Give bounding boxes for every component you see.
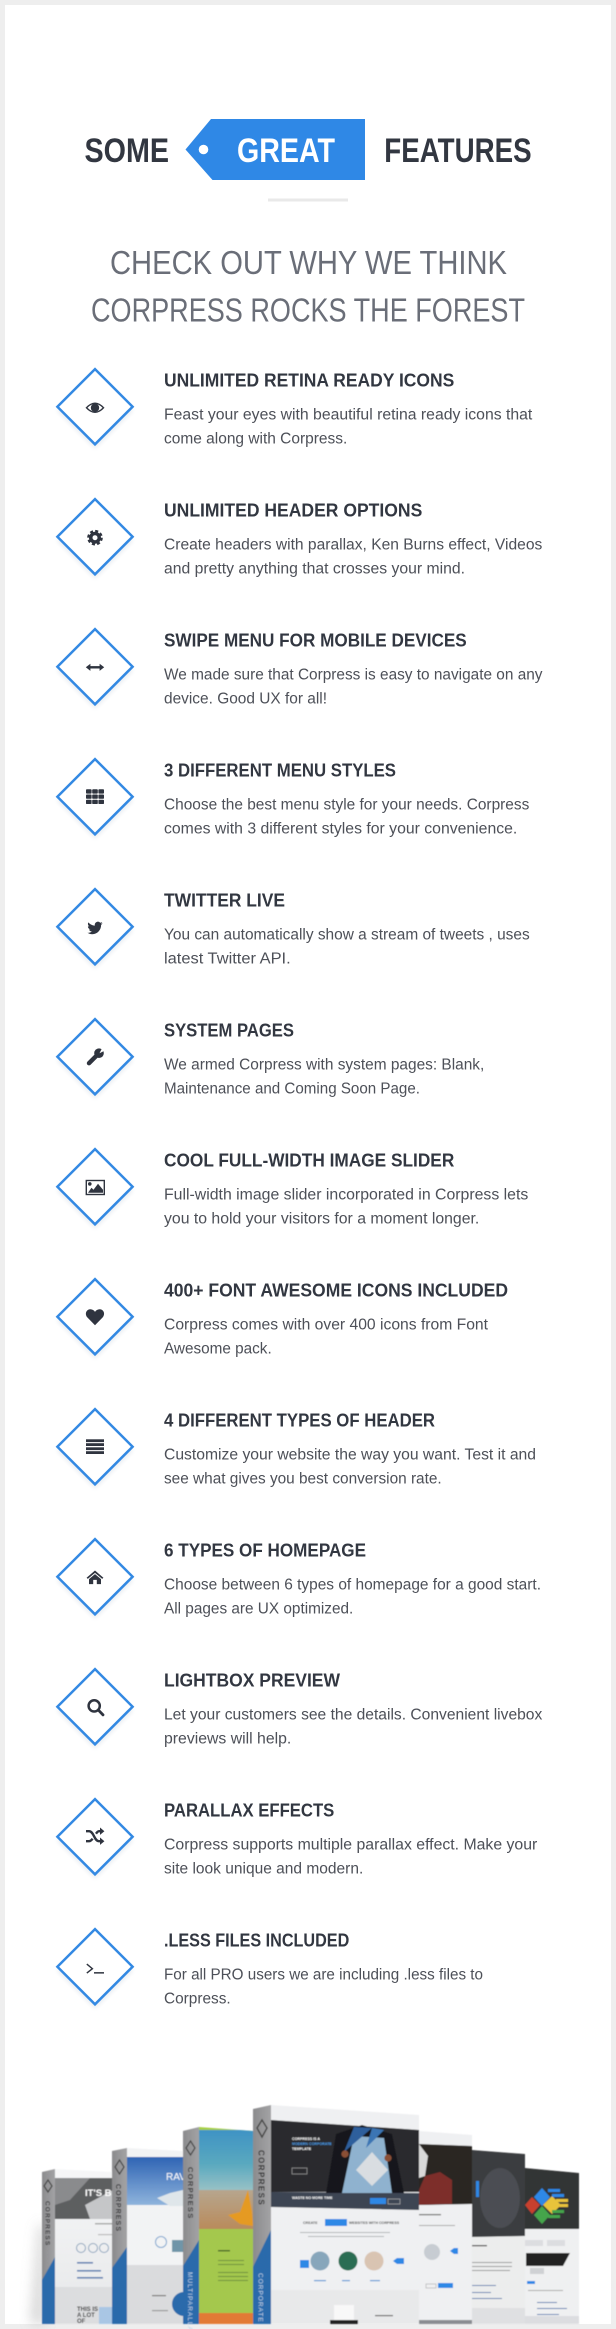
subtitle — [91, 245, 525, 330]
box 1: it's business: OF — [77, 2319, 86, 2325]
description: Maintenance and Coming Soon Page. — [164, 1080, 420, 1097]
feature: lightbox preview — [57, 1669, 543, 1749]
heading: PARALLAX EFFECTS — [164, 1801, 334, 1821]
box 4: corporate main — [253, 2105, 419, 2324]
feature: twitter live — [57, 889, 530, 969]
icon: gear in diamond — [57, 499, 133, 579]
icon: grid in diamond — [57, 759, 133, 839]
description: Corpress supports multiple parallax effect. Make your — [164, 1836, 537, 1853]
box 3: beach — [183, 2127, 253, 2329]
screen 7: diagram — [525, 2168, 579, 2324]
description: Customize your website the way you want. Test it and — [164, 1446, 536, 1463]
heading: LIGHTBOX PREVIEW — [164, 1671, 340, 1691]
feature: types of header — [57, 1409, 536, 1489]
description: Choose the best menu style for your needs. Corpress — [164, 796, 530, 813]
feature: unlimited retina ready icons — [57, 369, 533, 449]
description: Corpress comes with over 400 icons from Font — [164, 1316, 489, 1333]
description: Full-width image slider incorporated in Corpress lets — [164, 1186, 529, 1203]
description — [164, 536, 543, 577]
description — [164, 1706, 543, 1747]
box 4: corporate main: WEBSITES WITH CORPRESS — [349, 2221, 400, 2225]
feature: less files — [57, 1929, 483, 2009]
screen 5: dark red hero — [419, 2131, 472, 2324]
description: and pretty anything that crosses your mind. — [164, 560, 465, 577]
title: some great features: FEATURES — [384, 132, 532, 170]
icon: horizontal arrows in diamond — [57, 629, 133, 709]
feature: font awesome icons — [57, 1279, 508, 1359]
box 4: corporate main: CORPORATE — [256, 2273, 264, 2323]
icon: picture in diamond — [57, 1149, 133, 1229]
icon: magnifier in diamond — [57, 1669, 133, 1749]
description: All pages are UX optimized. — [164, 1600, 353, 1617]
description — [164, 1186, 529, 1227]
description: Feast your eyes with beautiful retina ready icons that — [164, 406, 533, 423]
box 2: shark — [111, 2148, 184, 2325]
title: some great features: GREAT — [237, 132, 335, 170]
description — [164, 926, 530, 967]
product boxes mockup — [30, 2105, 579, 2329]
description — [164, 666, 543, 707]
feature: system pages — [57, 1019, 484, 1099]
feature: types of homepage — [57, 1539, 541, 1619]
description — [164, 1576, 541, 1617]
subtitle: CHECK OUT WHY WE THINK — [110, 245, 507, 282]
heading: SWIPE MENU FOR MOBILE DEVICES — [164, 631, 467, 651]
description — [164, 1316, 489, 1357]
box 1: it's business: CORPRESS — [44, 2201, 50, 2246]
description — [164, 1446, 536, 1487]
description — [164, 406, 533, 447]
icon: twitter bird in diamond — [57, 889, 133, 969]
box 1: it's business: THIS IS — [77, 2307, 98, 2313]
description: comes with 3 different styles for your convenience. — [164, 820, 517, 837]
box 2: shark: CORPRESS — [114, 2184, 121, 2232]
description: latest Twitter API. — [164, 950, 291, 967]
description: Corpress. — [164, 1990, 231, 2007]
feature: image slider — [57, 1149, 529, 1229]
description: For all PRO users we are including .less files to — [164, 1966, 483, 1983]
heading: 400+ FONT AWESOME ICONS INCLUDED — [164, 1281, 508, 1301]
heading: UNLIMITED RETINA READY ICONS — [164, 371, 454, 391]
title: some great features — [84, 119, 532, 180]
icon: heart in diamond — [57, 1279, 133, 1359]
box 1: it's business: A LOT — [77, 2313, 95, 2319]
box 1: it's business: IT'S BUS — [85, 2188, 125, 2199]
description — [164, 1836, 537, 1877]
icon: bars in diamond — [57, 1409, 133, 1489]
heading: 6 TYPES OF HOMEPAGE — [164, 1541, 366, 1561]
description: Let your customers see the details. Convenient livebox — [164, 1706, 543, 1723]
description: you to hold your visitors for a moment longer. — [164, 1210, 479, 1227]
icon: house in diamond — [57, 1539, 133, 1619]
box 2: shark: RAV — [166, 2172, 186, 2183]
description: Choose between 6 types of homepage for a good start. — [164, 1576, 541, 1593]
box 1: it's business — [41, 2168, 113, 2325]
description: You can automatically show a stream of tweets , uses — [164, 926, 530, 943]
description: device. Good UX for all! — [164, 690, 327, 707]
description: Awesome pack. — [164, 1340, 272, 1357]
heading: 3 DIFFERENT MENU STYLES — [164, 761, 396, 781]
description — [164, 1056, 484, 1097]
feature: parallax effects — [57, 1799, 537, 1879]
description: We armed Corpress with system pages: Blank, — [164, 1056, 484, 1073]
hero figure — [326, 2125, 404, 2193]
heading divider — [268, 198, 348, 202]
feature: unlimited header options — [57, 499, 543, 579]
heading: SYSTEM PAGES — [164, 1021, 294, 1041]
box 4: corporate main: WASTE NO MORE TIME — [292, 2196, 333, 2200]
heading: 4 DIFFERENT TYPES OF HEADER — [164, 1411, 435, 1431]
description: see what gives you best conversion rate. — [164, 1470, 442, 1487]
feature: swipe menu — [57, 629, 543, 709]
heading: UNLIMITED HEADER OPTIONS — [164, 501, 422, 521]
heading: .LESS FILES INCLUDED — [164, 1931, 349, 1951]
description: We made sure that Corpress is easy to navigate on any — [164, 666, 543, 683]
title: some great features: SOME — [84, 132, 169, 170]
screen 6: dark photo — [472, 2150, 525, 2324]
box 4: corporate main: CORPRESS IS A — [292, 2137, 320, 2141]
feature: 3 different menu styles — [57, 759, 530, 839]
description: previews will help. — [164, 1730, 291, 1747]
icon: terminal prompt in diamond — [57, 1929, 133, 2009]
icon: wrench in diamond — [57, 1019, 133, 1099]
description: Create headers with parallax, Ken Burns effect, Videos — [164, 536, 543, 553]
heading: TWITTER LIVE — [164, 891, 285, 911]
box 3: beach: CORPRESS — [186, 2167, 195, 2220]
description: come along with Corpress. — [164, 430, 347, 447]
box 4: corporate main: CORPRESS — [256, 2150, 266, 2206]
description — [164, 796, 530, 837]
description: site look unique and modern. — [164, 1860, 363, 1877]
icon: eye in diamond — [57, 369, 133, 449]
box 4: corporate main: TEMPLATE — [292, 2147, 312, 2151]
box shadow — [30, 2225, 46, 2324]
subtitle: CORPRESS ROCKS THE FOREST — [91, 292, 525, 330]
icon: shuffle in diamond — [57, 1799, 133, 1879]
heading: COOL FULL-WIDTH IMAGE SLIDER — [164, 1151, 454, 1171]
box 4: corporate main: MODERN CORPORATE — [292, 2142, 332, 2146]
box 4: corporate main: CREATE — [303, 2221, 318, 2225]
description — [164, 1966, 483, 2007]
